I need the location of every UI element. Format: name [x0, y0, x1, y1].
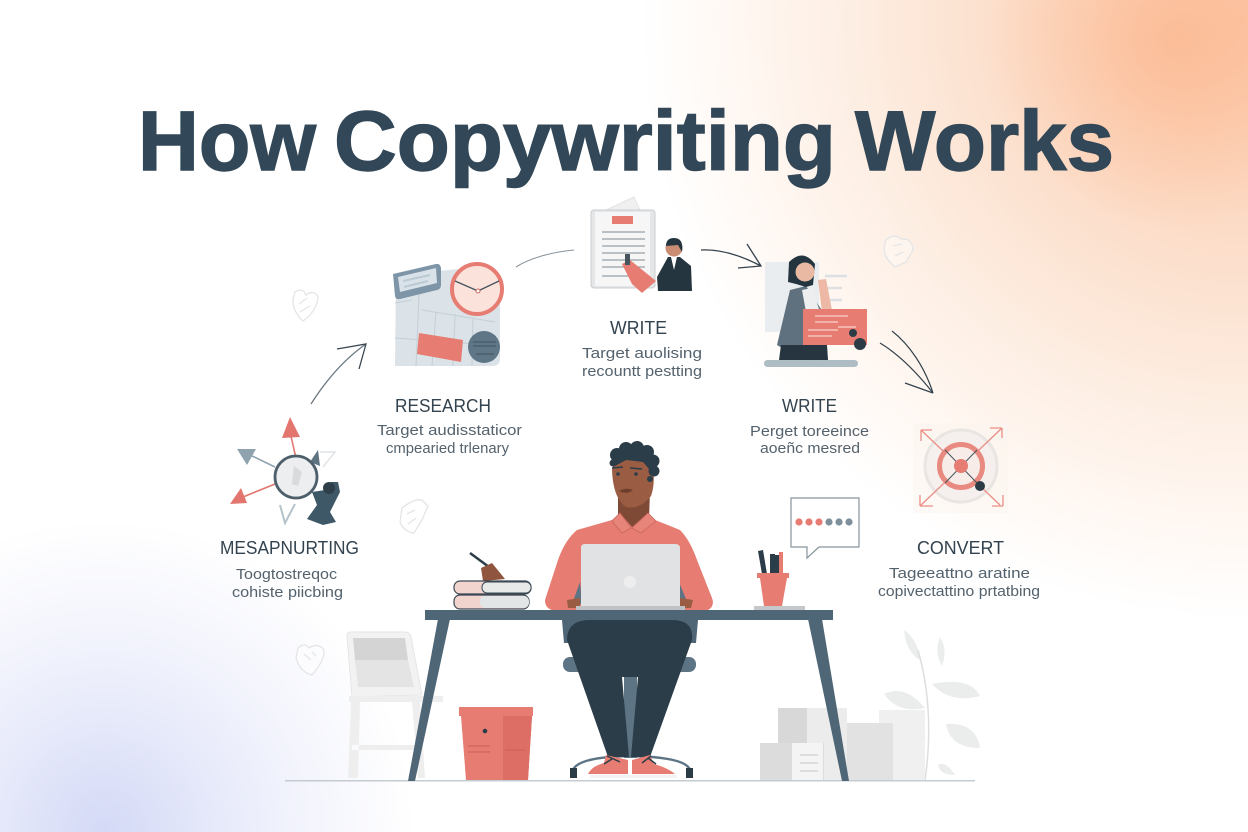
icon: target — [913, 423, 1008, 513]
icon: document and writer — [591, 197, 692, 293]
laptop — [576, 544, 685, 610]
faded chair in background — [347, 632, 443, 778]
ground line — [285, 780, 975, 782]
step label: WRITE (right): aoeñc mesred — [760, 441, 860, 457]
step label: CONVERT: Tageeattno aratine — [889, 566, 1030, 582]
legs — [567, 620, 692, 757]
decorative leaf doodles — [293, 236, 913, 675]
step label: WRITE (right): Perget toreeince — [750, 424, 869, 440]
step label: MESAPNURTING: Toogtostreqoc — [236, 567, 337, 583]
pen cup — [754, 550, 805, 610]
step label: RESEARCH: RESEARCH — [395, 395, 491, 416]
step label: CONVERT: copivectattino prtatbing — [878, 584, 1040, 600]
arrow: research to write — [516, 250, 574, 267]
arrow: write to convert — [880, 331, 933, 393]
chair — [562, 620, 698, 778]
step label: CONVERT — [878, 537, 1040, 600]
arrow: step 1 to research — [311, 344, 366, 404]
speech bubble — [791, 498, 859, 558]
step label: WRITE (centre) — [582, 317, 702, 380]
step label: WRITE (centre): WRITE — [610, 317, 667, 338]
step label: RESEARCH — [377, 395, 522, 457]
icon: research calendar and clock — [393, 264, 502, 366]
step label: RESEARCH: Target audisstaticor — [377, 423, 522, 439]
step label: WRITE (right) — [750, 395, 869, 457]
icon: magnifier with arrows — [230, 417, 340, 525]
step label: WRITE (centre): recountt pestting — [582, 364, 702, 380]
shoes — [588, 755, 628, 774]
step label: WRITE (right): WRITE — [782, 395, 837, 416]
step label: MESAPNURTING — [220, 537, 359, 601]
title — [138, 94, 1114, 188]
step label: MESAPNURTING: MESAPNURTING — [220, 537, 359, 558]
step label: WRITE (centre): Target auolising — [582, 346, 702, 362]
waste bin — [459, 707, 533, 780]
title: Works — [855, 94, 1114, 188]
step label: RESEARCH: cmpearied trlenary — [386, 441, 510, 457]
step label: MESAPNURTING: cohiste piicbing — [232, 585, 343, 601]
hair — [610, 441, 660, 482]
person — [545, 441, 713, 778]
faded plant and boxes — [760, 630, 980, 780]
title: How — [138, 94, 317, 188]
arrow: write to write — [701, 244, 761, 268]
desk — [408, 610, 849, 781]
icon: woman with card — [764, 255, 867, 367]
head — [612, 458, 654, 508]
title: Copywriting — [334, 94, 836, 188]
books and hand with pen — [454, 553, 531, 609]
step label: CONVERT: CONVERT — [917, 537, 1004, 558]
shirt — [545, 513, 713, 610]
neck — [618, 490, 650, 532]
